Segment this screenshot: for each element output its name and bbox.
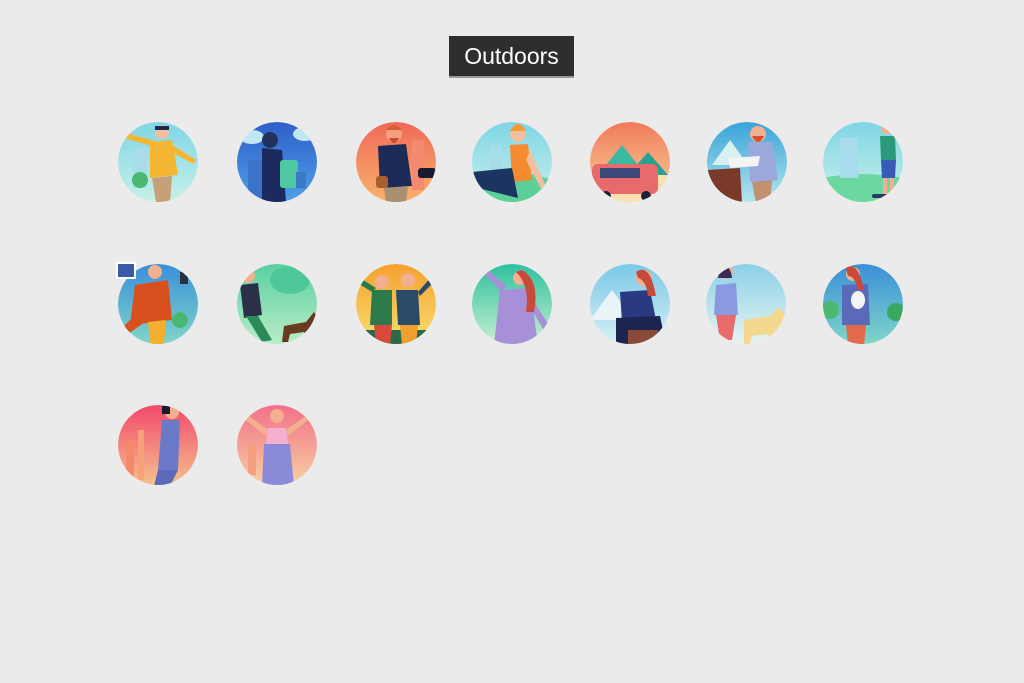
icon: woman with cat (row2 col7) (821, 264, 905, 345)
title: Outdoors (464, 43, 559, 69)
icon: photographer (row1 col3) (356, 122, 436, 203)
icon grid (116, 122, 903, 485)
icon: man with camera at sunset (row3 col1) (118, 405, 198, 486)
icon: walking dog (row2 col2) (237, 264, 318, 344)
icon: woman arms out (row2 col4) (472, 264, 552, 345)
icon: person waving (row1 col1) (118, 122, 198, 202)
icon: woman arms raised (row3 col2) (237, 405, 317, 486)
icon: friends celebrating (row2 col3) (356, 264, 436, 346)
icon: skateboarder (row1 col7) (823, 122, 903, 202)
icon: woman with golden dog (row2 col6) (706, 264, 786, 344)
icon: van in mountains (row1 col5) (590, 122, 670, 202)
icon: sitting woman in beanie (row1 col4) (472, 122, 552, 202)
icon: man with map (row1 col6) (706, 122, 787, 203)
icon: sitting woman (row2 col5) (590, 264, 670, 345)
title (449, 36, 574, 78)
icon: man with phone (row2 col1) (117, 263, 198, 345)
icon: hiker with binoculars (row1 col2) (237, 122, 317, 202)
